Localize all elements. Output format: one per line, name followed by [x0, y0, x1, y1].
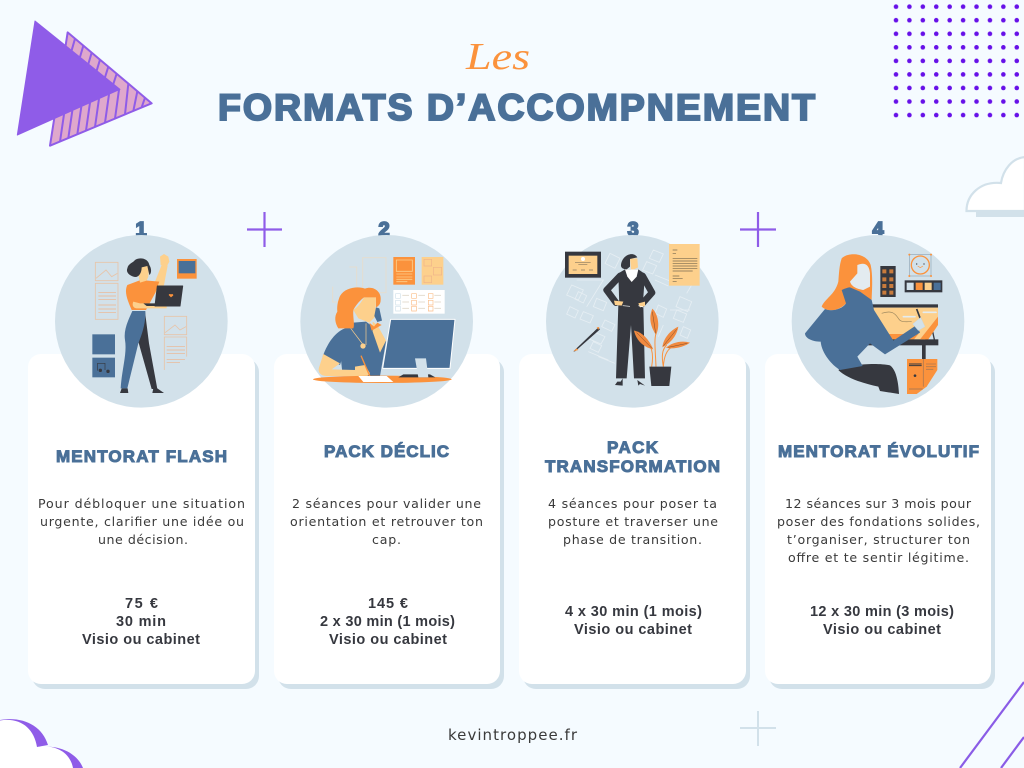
- pricing: card 1: 30 min: [116, 614, 166, 630]
- pricing: card 1: [82, 596, 200, 648]
- heading: Mentorat Flash: MENTORAT FLASH: [56, 447, 227, 466]
- description: card 3: phase de transition.: [563, 532, 702, 547]
- title: FORMATS D’ACCOMPNEMENT: [218, 86, 815, 128]
- description: card 2: orientation et retrouver ton: [290, 514, 483, 529]
- description: card 1: urgente, clarifier une idée ou: [40, 514, 244, 529]
- title script: Les: Les: [465, 36, 530, 78]
- description: card 4: t’organiser, structurer ton: [787, 532, 970, 547]
- description: card 2: 2 séances pour valider une: [292, 496, 481, 511]
- illustration: woman drawing at tablet: [792, 235, 964, 408]
- pricing: card 1: 75 €: [125, 596, 158, 612]
- description: card 1: [38, 496, 245, 547]
- description: card 1: une décision.: [98, 532, 188, 547]
- plus icon purple left: [247, 212, 282, 247]
- heading: Pack Transformation: [545, 438, 720, 476]
- plus icon purple right: [740, 212, 776, 247]
- number 3: 3: [627, 219, 639, 241]
- plus icon light bottom: [740, 711, 776, 746]
- description: card 4: offre et te sentir légitime.: [788, 550, 969, 565]
- description: card 3: 4 séances pour poser ta: [548, 496, 717, 511]
- pricing: card 3: [565, 604, 702, 638]
- heading: Pack Transformation: TRANSFORMATION: [545, 457, 720, 476]
- description: card 4: [777, 496, 980, 565]
- pricing: card 4: [810, 604, 954, 638]
- illustration: woman with laptop: [55, 235, 228, 408]
- pricing: card 4: 12 x 30 min (3 mois): [810, 604, 954, 620]
- description: card 4: poser des fondations solides,: [777, 514, 980, 529]
- heading: Pack Transformation: PACK: [607, 438, 659, 457]
- description: card 4: 12 séances sur 3 mois pour: [785, 496, 972, 511]
- pricing: card 3: 4 x 30 min (1 mois): [565, 604, 702, 620]
- heading: Pack Déclic: PACK DÉCLIC: [324, 442, 449, 461]
- description: card 3: [548, 496, 718, 547]
- heading: Mentorat Évolutif: MENTORAT ÉVOLUTIF: [778, 442, 979, 461]
- icon: cloud top right: [966, 157, 1024, 217]
- panel: card 1: [28, 354, 259, 689]
- panel: card 3: [519, 354, 750, 689]
- illustration: woman on phone at desk: [300, 235, 473, 408]
- description: card 1: Pour débloquer une situation: [38, 496, 245, 511]
- number 2: 2: [378, 219, 390, 241]
- number 1: 1: [135, 219, 147, 241]
- number 4: 4: [872, 219, 884, 241]
- dot grid decoration: [889, 0, 1024, 122]
- description: card 3: posture et traverser une: [548, 514, 718, 529]
- panel: card 4: [765, 354, 995, 689]
- footer website: kevintroppee.fr: [448, 726, 578, 744]
- description: card 2: cap.: [372, 532, 401, 547]
- pricing: card 2: Visio ou cabinet: [329, 632, 447, 648]
- diagonal lines bottom right: [960, 682, 1024, 768]
- icon: overlapping purple triangles: [17, 21, 152, 146]
- pricing: card 2: [320, 596, 455, 648]
- panel: card 2: [274, 354, 504, 689]
- pricing: card 3: Visio ou cabinet: [574, 622, 692, 638]
- description: card 2: [290, 496, 483, 547]
- illustration: woman in suit with plant: [546, 235, 719, 408]
- icon: cloud bottom left: [0, 719, 83, 768]
- pricing: card 4: Visio ou cabinet: [823, 622, 941, 638]
- pricing: card 2: 2 x 30 min (1 mois): [320, 614, 455, 630]
- pricing: card 1: Visio ou cabinet: [82, 632, 200, 648]
- pricing: card 2: 145 €: [368, 596, 408, 612]
